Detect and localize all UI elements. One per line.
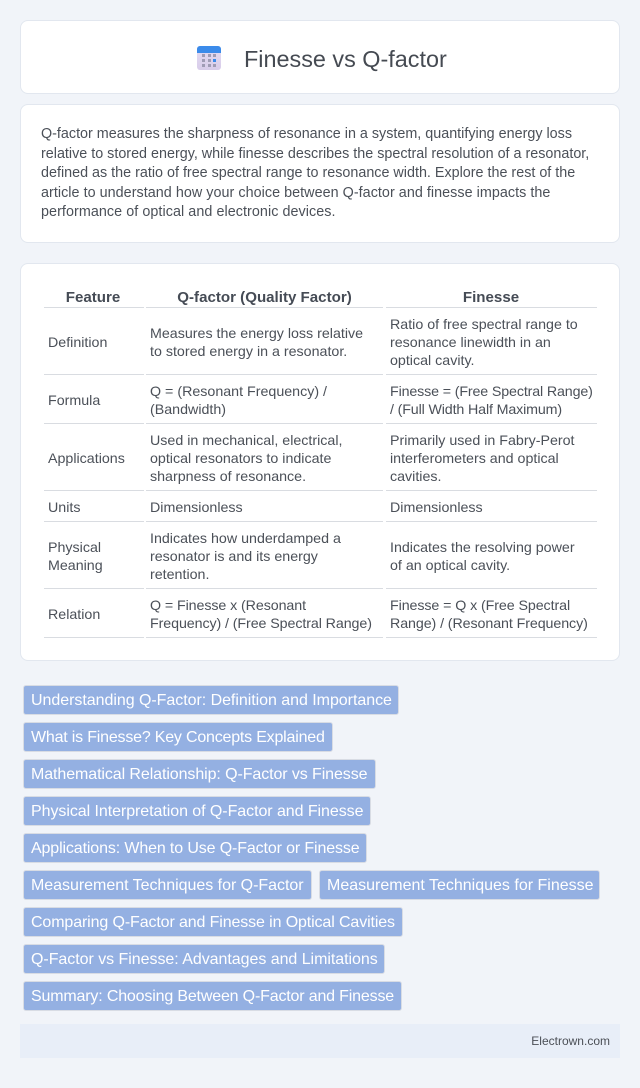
link tag: what is finesse	[23, 722, 333, 752]
intro paragraph: performance of optical and electronic devices.	[41, 204, 336, 220]
row: relation: Relation	[48, 607, 100, 623]
table header: Q-factor (Quality Factor)	[177, 289, 352, 306]
panel: intro text	[20, 104, 620, 243]
row: units	[48, 500, 483, 516]
link tag: summary	[23, 981, 402, 1011]
link tag: comparing: Comparing Q-Factor and Finesse in Optical Cavities	[31, 914, 395, 931]
intro paragraph: defined as the ratio of free spectral range to resonance width. Explore the rest of the	[41, 165, 575, 181]
row: physical meaning: Meaning	[48, 558, 103, 574]
row: relation: Q = Finesse x (Resonant	[150, 598, 306, 614]
row: physical meaning: resonator is and its energy	[150, 549, 318, 565]
row: physical meaning: of an optical cavity.	[390, 558, 510, 574]
row: relation: Finesse = Q x (Free Spectral	[390, 598, 570, 614]
row: applications: interferometers and optical	[390, 451, 559, 467]
footer	[20, 1024, 620, 1058]
row: physical meaning: retention.	[150, 567, 209, 583]
row: applications: sharpness of resonance.	[150, 469, 306, 485]
intro paragraph: Q-factor measures the sharpness of resonance in a system, quantifying energy loss	[41, 126, 572, 142]
link tag: measurement q-factor	[23, 870, 312, 900]
row: formula: (Bandwidth)	[150, 402, 226, 418]
row: relation	[48, 598, 588, 632]
icon: calendar	[197, 46, 221, 70]
footer credit: Electrown.com	[531, 1034, 610, 1048]
link tag: measurement finesse	[319, 870, 600, 900]
row: applications: Used in mechanical, electrical,	[150, 433, 342, 449]
link tag: understanding	[23, 685, 399, 715]
link tag: what is finesse: What is Finesse? Key Concepts Explained	[31, 729, 325, 746]
row: definition: Measures the energy loss relative	[150, 326, 363, 342]
row: physical meaning: Indicates how underdamped a	[150, 531, 341, 547]
row: relation: Range) / (Resonant Frequency)	[390, 616, 588, 632]
row: units: Dimensionless	[390, 500, 483, 516]
panel: comparison table	[20, 263, 620, 661]
link tag: summary: Summary: Choosing Between Q-Factor and Finesse	[31, 988, 394, 1005]
row: applications	[48, 433, 575, 485]
row: definition	[48, 317, 578, 369]
link tag: applications	[23, 833, 367, 863]
row: formula: / (Full Width Half Maximum)	[390, 402, 562, 418]
link tag: physical interpretation	[23, 796, 371, 826]
link tag: mathematical relationship: Mathematical Relationship: Q-Factor vs Finesse	[31, 766, 367, 783]
link tag: advantages: Q-Factor vs Finesse: Advantages and Limitations	[31, 951, 378, 968]
row: applications: optical resonators to indicate	[150, 451, 331, 467]
row: definition: Definition	[48, 335, 107, 351]
table header: Finesse	[463, 289, 519, 306]
row: applications: cavities.	[390, 469, 441, 485]
row: relation: Frequency) / (Free Spectral Range)	[150, 616, 372, 632]
row: definition: Ratio of free spectral range to	[390, 317, 578, 333]
row: formula: Q = (Resonant Frequency) /	[150, 384, 327, 400]
row: formula: Formula	[48, 393, 100, 409]
title: Finesse vs Q-factor	[244, 46, 447, 72]
intro paragraph	[41, 126, 589, 220]
row: physical meaning: Indicates the resolving power	[390, 540, 575, 556]
link tag: comparing	[23, 907, 403, 937]
link tag: advantages	[23, 944, 385, 974]
intro paragraph: article to understand how your choice between Q-factor and finesse impacts the	[41, 185, 550, 201]
link tag: mathematical relationship	[23, 759, 376, 789]
link tag: measurement finesse: Measurement Techniques for Finesse	[327, 877, 594, 894]
row: applications: Applications	[48, 451, 125, 467]
row: definition: resonance linewidth in an	[390, 335, 551, 351]
link tag: measurement q-factor: Measurement Techniques for Q-Factor	[31, 877, 304, 894]
row: formula: Finesse = (Free Spectral Range)	[390, 384, 593, 400]
row: applications: Primarily used in Fabry-Perot	[390, 433, 575, 449]
row: physical meaning: Physical	[48, 540, 101, 556]
table header	[66, 289, 519, 306]
link tag: understanding: Understanding Q-Factor: Definition and Importance	[31, 692, 392, 709]
row: definition: to stored energy in a resonator.	[150, 344, 347, 360]
intro paragraph: relative to stored energy, while finesse describes the spectral resolution of a resonator,	[41, 146, 589, 162]
link tag: physical interpretation: Physical Interpretation of Q-Factor and Finesse	[31, 803, 363, 820]
row: physical meaning	[48, 531, 575, 583]
row: units: Units	[48, 500, 80, 516]
row: units: Dimensionless	[150, 500, 243, 516]
row: formula	[48, 384, 593, 418]
table header: Feature	[66, 289, 120, 306]
row: definition: optical cavity.	[390, 353, 474, 369]
header panel	[20, 20, 620, 94]
link tag: applications: Applications: When to Use Q-Factor or Finesse	[31, 840, 360, 857]
